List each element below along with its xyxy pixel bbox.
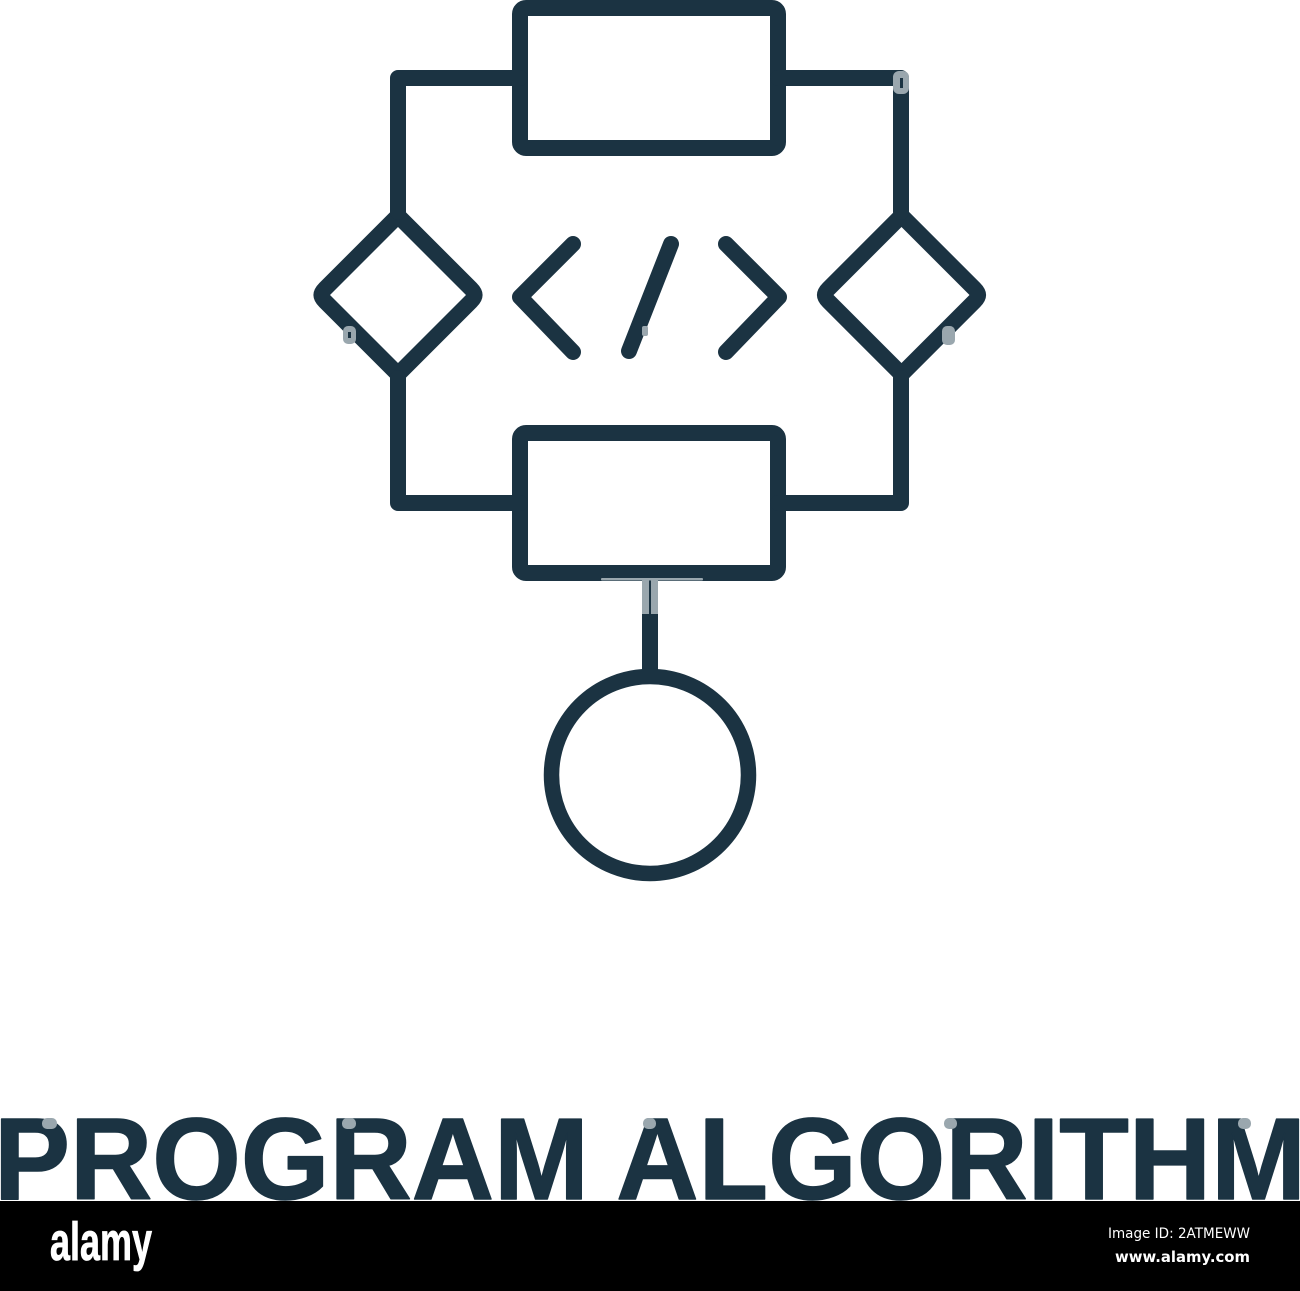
connector: right diamond to bottom box	[778, 378, 901, 503]
connector: top box to right diamond	[778, 78, 901, 212]
right decision diamond	[817, 204, 986, 386]
terminal circle	[552, 676, 748, 874]
footer bar	[0, 1201, 1300, 1291]
image id: Image ID: 2ATMEWW	[1108, 1226, 1250, 1242]
watermark traces	[42, 71, 1251, 1129]
connector: bottom box to end circle	[642, 573, 658, 675]
website: www.alamy.com	[1115, 1248, 1250, 1266]
title: PROGRAM ALGORITHM	[0, 1094, 1300, 1224]
connector: left diamond to bottom box	[398, 378, 520, 503]
logo: alamy: alamy	[50, 1212, 152, 1272]
left decision diamond	[313, 204, 483, 386]
icon: program algorithm flowchart	[313, 8, 986, 874]
bottom process box	[520, 433, 778, 573]
top process box	[520, 8, 778, 148]
code symbol: left chevron	[520, 244, 573, 352]
connector: top box to left diamond	[398, 78, 520, 212]
code symbol: slash	[629, 244, 671, 351]
code symbol: right chevron	[726, 244, 779, 352]
